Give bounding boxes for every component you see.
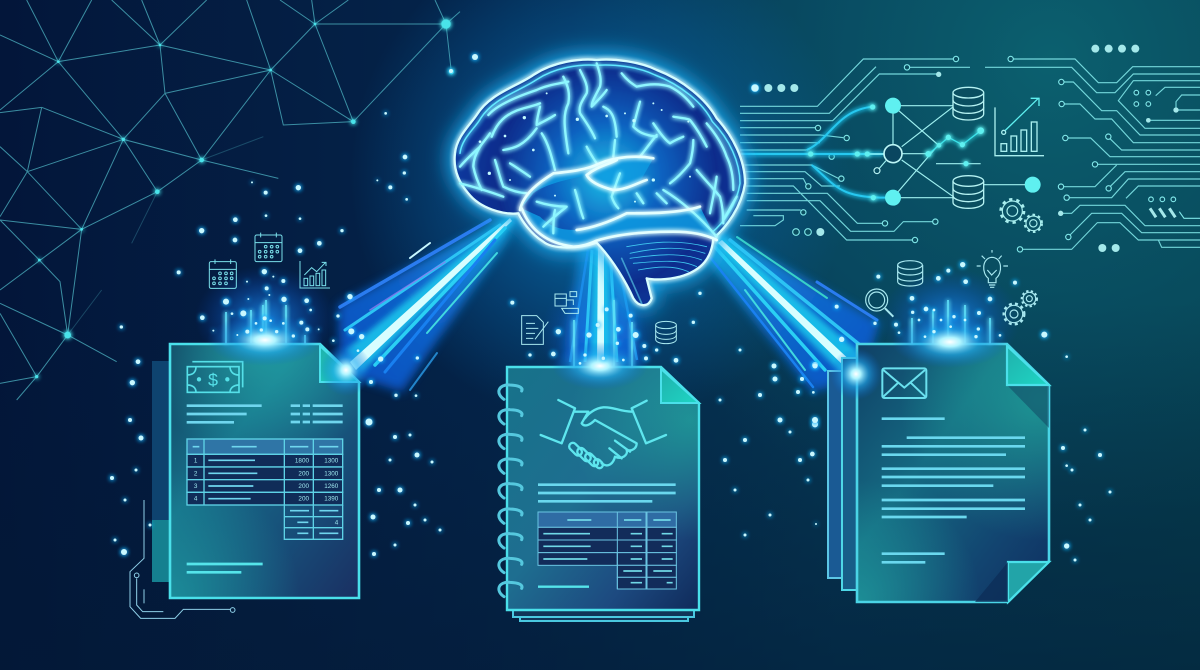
invoice table: 200 bbox=[298, 496, 309, 503]
invoice table: 4 bbox=[194, 496, 198, 503]
document two: agreement notebook bbox=[499, 367, 699, 621]
circuit board network top right bbox=[740, 45, 1200, 252]
floating icons above invoice bbox=[209, 233, 330, 288]
light beam left bbox=[338, 212, 515, 392]
brain bbox=[455, 60, 745, 305]
database icon two bbox=[953, 176, 984, 208]
brain sparkles bbox=[479, 92, 691, 203]
invoice table: 3 bbox=[194, 483, 198, 490]
database icon bbox=[898, 261, 923, 286]
document three: letter bbox=[828, 344, 1049, 602]
notebook base bbox=[513, 610, 694, 621]
left traces bbox=[740, 59, 970, 240]
invoice table: 1390 bbox=[324, 496, 339, 503]
invoice table: 4 bbox=[335, 519, 339, 526]
invoice table bbox=[187, 439, 343, 539]
invoice table: 200 bbox=[298, 470, 309, 477]
handshake icon bbox=[541, 400, 666, 470]
invoice table: 2 bbox=[194, 470, 198, 477]
banknote icon bbox=[187, 362, 243, 392]
rising zigzag bbox=[928, 131, 981, 154]
gears icon bbox=[1004, 291, 1037, 324]
database icon bbox=[656, 321, 676, 344]
invoice table: 1 bbox=[194, 458, 198, 465]
magnifier icon bbox=[866, 289, 893, 317]
particles beside invoice bbox=[110, 54, 478, 556]
invoice table: 1260 bbox=[324, 483, 339, 490]
particles above agreement bbox=[510, 292, 702, 365]
signature line bbox=[538, 583, 589, 590]
page folds bbox=[975, 346, 1049, 602]
invoice table: 1300 bbox=[324, 458, 339, 465]
calendar icon top bbox=[255, 233, 282, 262]
brain glow bbox=[455, 60, 745, 305]
page body bbox=[857, 344, 1049, 602]
brain body bbox=[455, 60, 745, 305]
spiral binding bbox=[499, 385, 522, 597]
trace end circles bbox=[793, 56, 1176, 252]
particles around invoice bbox=[120, 112, 419, 397]
growth chart icon bbox=[300, 261, 330, 288]
envelope icon bbox=[882, 368, 926, 398]
particles around letter bbox=[810, 262, 1069, 549]
glowing data streams bbox=[740, 107, 887, 198]
light bulb icon bbox=[977, 250, 1008, 287]
cerebellum bbox=[627, 242, 707, 272]
neural network mesh top left bbox=[0, 0, 460, 400]
workflow icon bbox=[555, 292, 578, 313]
light beam right bbox=[706, 228, 880, 392]
top light flares on documents bbox=[207, 300, 1008, 400]
header lines bbox=[187, 406, 343, 422]
particles beside agreement and letter bbox=[718, 84, 1112, 562]
calendar icon left bbox=[209, 259, 236, 288]
agreement table bbox=[538, 512, 676, 589]
right traces bbox=[985, 59, 1200, 249]
back page bbox=[152, 361, 182, 582]
gears icon bbox=[1001, 199, 1042, 232]
circuit trace bottom left bbox=[130, 500, 235, 618]
invoice table: 200 bbox=[298, 483, 309, 490]
notepad and pen icon bbox=[522, 316, 548, 344]
page body bbox=[507, 367, 699, 610]
page body bbox=[170, 344, 359, 598]
text lines bbox=[538, 485, 676, 501]
bright central fissure bbox=[520, 157, 717, 247]
temporal lobe bbox=[520, 157, 717, 247]
stripes bbox=[1150, 208, 1175, 217]
floating icons above agreement bbox=[522, 292, 676, 344]
invoice table: 1800 bbox=[295, 458, 309, 465]
floating icons above letter bbox=[866, 250, 1037, 324]
network graph bbox=[869, 106, 953, 198]
light beam centre bbox=[564, 235, 640, 366]
indicator dots bbox=[751, 45, 1179, 252]
letter text lines bbox=[882, 419, 1025, 562]
brain inner outline bbox=[460, 65, 740, 233]
document one: invoice bbox=[152, 344, 359, 598]
glow rising from documents bbox=[195, 266, 1020, 395]
database icon one bbox=[953, 87, 984, 120]
footer lines bbox=[187, 564, 263, 572]
bar chart icon bbox=[995, 98, 1044, 156]
page fold bbox=[661, 369, 699, 403]
back pages bbox=[828, 371, 860, 578]
cerebral folds bbox=[460, 63, 737, 237]
page fold bbox=[320, 346, 359, 382]
banknote icon: $ bbox=[208, 370, 218, 390]
brain stem highlight bbox=[622, 258, 642, 303]
invoice table: 1300 bbox=[324, 470, 339, 477]
